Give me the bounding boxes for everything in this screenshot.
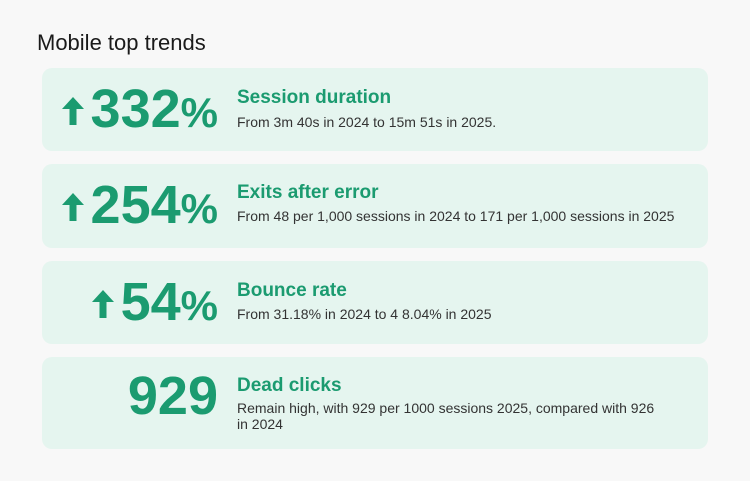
stat number: % [181,282,218,329]
heading: Exits after error [237,182,379,203]
description: From 48 per 1,000 sessions in 2024 to 171 per 1,000 sessions in 2025 [237,208,674,224]
panel: exits after error [42,164,708,248]
panel: dead clicks [42,357,708,449]
stat number [92,272,218,332]
description: From 31.18% in 2024 to 4 8.04% in 2025 [237,306,492,322]
stat number [62,175,218,235]
heading: Dead clicks [237,375,342,396]
stat number: 929 [128,366,218,426]
description: Remain high, with 929 per 1000 sessions 2025, compared with 926 in 2024 [237,400,654,432]
panel: session duration [42,68,708,151]
stat number: % [181,185,218,232]
stat number: % [181,89,218,136]
stat number: 254 [91,175,181,235]
stat number: 332 [91,79,181,139]
panel: bounce rate [42,261,708,344]
title: Mobile top trends [37,30,206,55]
heading: Session duration [237,87,391,108]
stat number [62,79,218,139]
description: From 3m 40s in 2024 to 15m 51s in 2025. [237,114,496,130]
stat number: 54 [121,272,181,332]
heading: Bounce rate [237,280,347,301]
